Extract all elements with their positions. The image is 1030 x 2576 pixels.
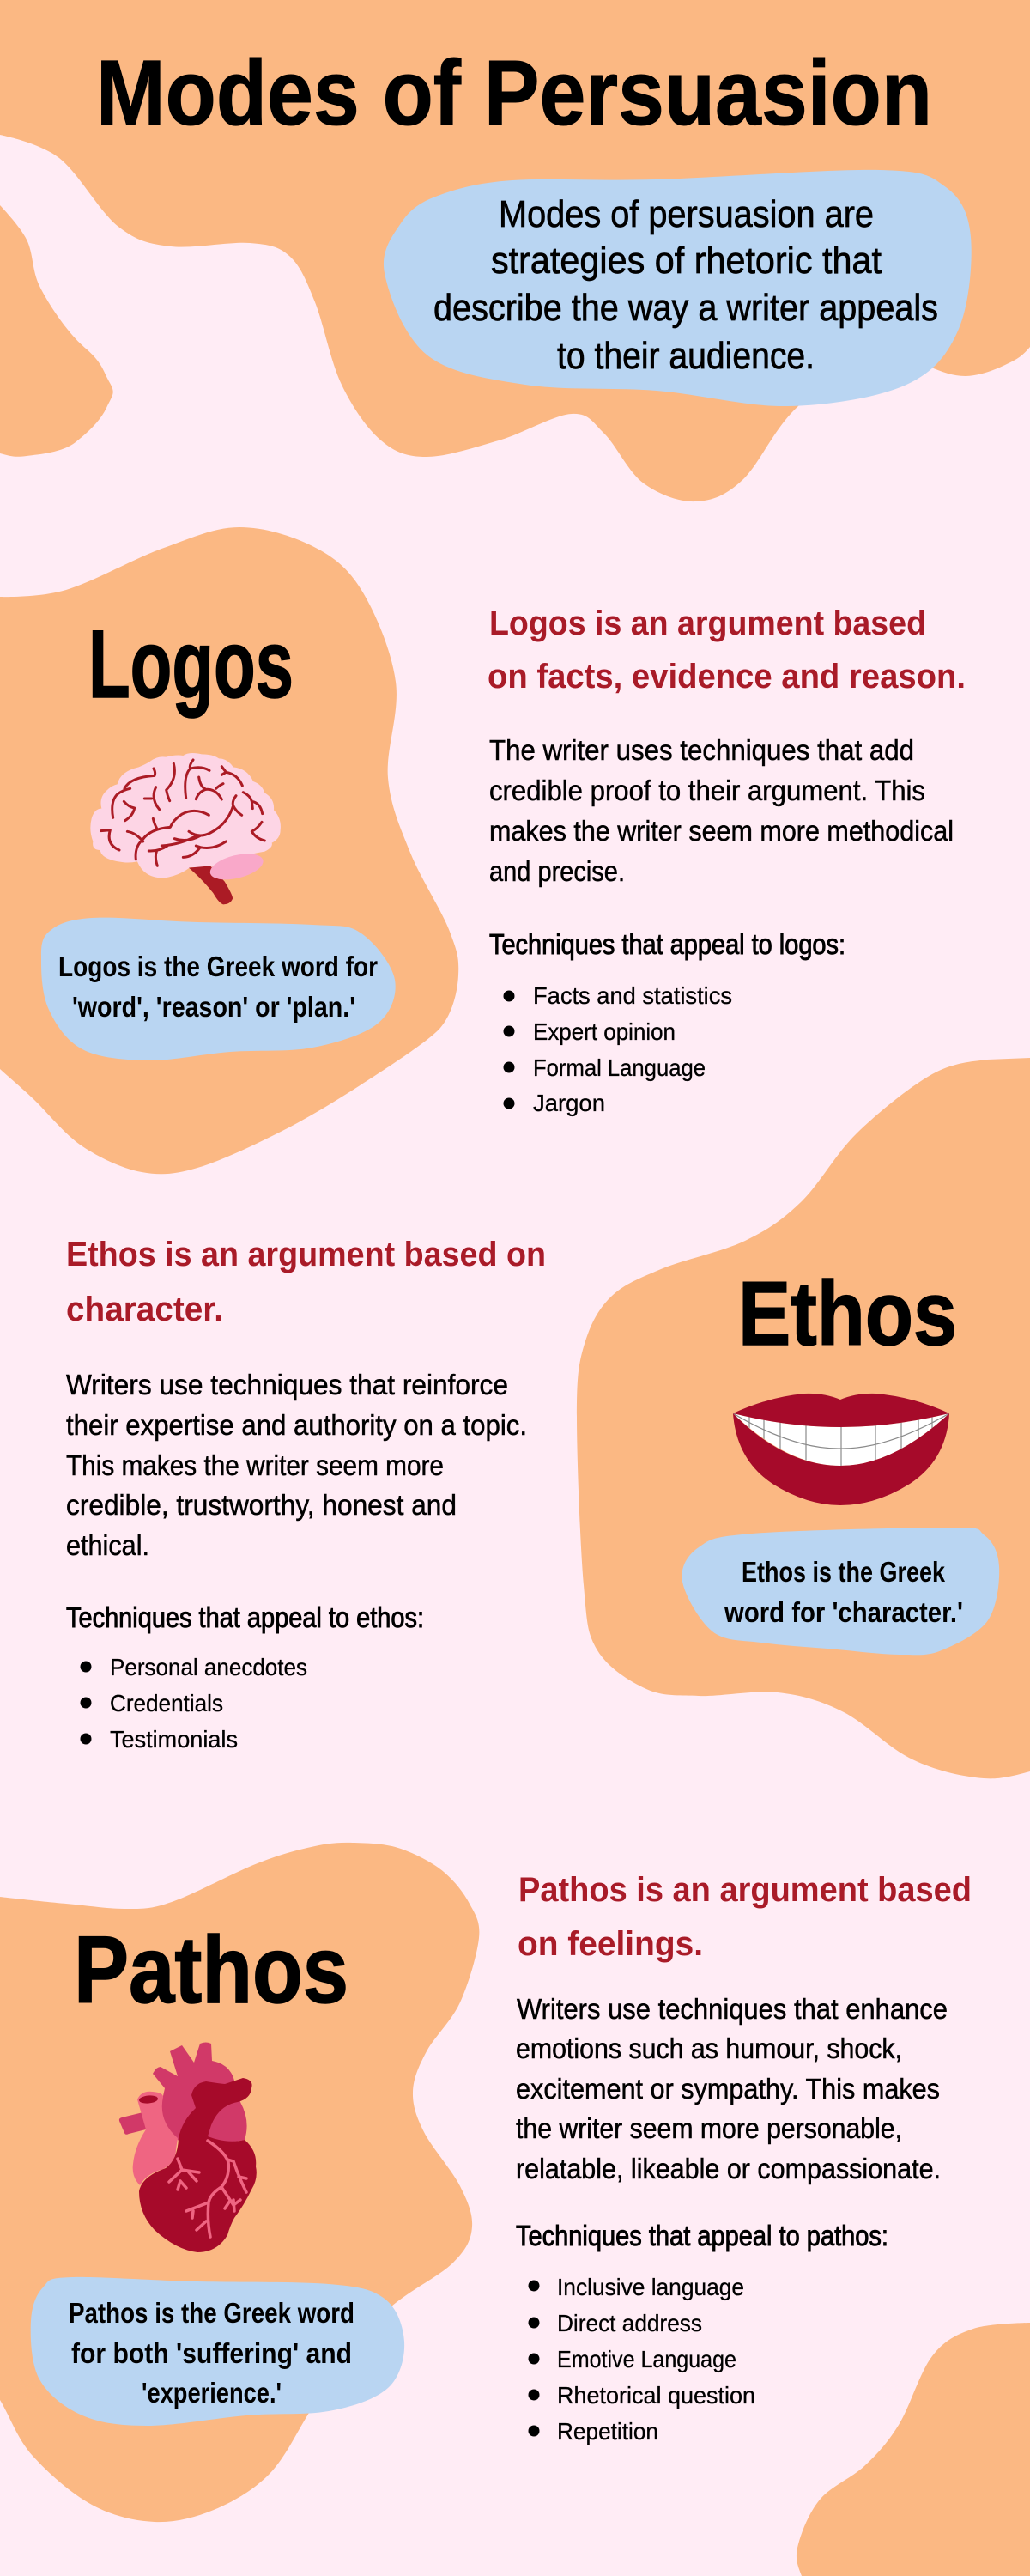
panel: logos: [0, 527, 966, 1174]
ethos heading text: [66, 1236, 546, 1328]
logos caption: 'word', 'reason' or 'plan.': [72, 991, 355, 1023]
icon: brain: [90, 753, 281, 904]
pathos caption: Pathos is the Greek word: [69, 2297, 354, 2329]
ethos body text: Writers use techniques that reinforce: [66, 1369, 508, 1400]
logos heading: Logos: [88, 611, 294, 718]
ethos blue blob: [682, 1528, 999, 1655]
ethos body text: This makes the writer seem more: [66, 1449, 444, 1481]
ethos techniques list: Personal anecdotes: [110, 1654, 307, 1680]
intro text: [433, 193, 938, 377]
pathos body text: emotions such as humour, shock,: [516, 2032, 902, 2064]
pathos techniques list: Repetition: [557, 2418, 658, 2445]
logos body text: The writer uses techniques that add: [489, 734, 914, 766]
ethos caption: word for 'character.': [724, 1596, 963, 1628]
ethos techniques label: Techniques that appeal to ethos:: [66, 1601, 424, 1633]
pathos heading text: Pathos is an argument based: [518, 1871, 972, 1909]
pathos body text: Writers use techniques that enhance: [517, 1993, 948, 2025]
ethos body text: ethical.: [66, 1529, 149, 1561]
logos caption: [58, 951, 378, 1023]
ethos caption: Ethos is the Greek: [742, 1556, 946, 1588]
pathos body text: relatable, likeable or compassionate.: [516, 2153, 941, 2184]
ethos body text: credible, trustworthy, honest and: [66, 1489, 457, 1521]
logos blue blob: [41, 918, 396, 1060]
logos heading text: Logos is an argument based: [489, 605, 926, 642]
intro text: Modes of persuasion are: [499, 193, 874, 235]
pathos blue blob: [31, 2277, 404, 2426]
pathos techniques label: Techniques that appeal to pathos:: [516, 2220, 888, 2251]
logos body text: credible proof to their argument. This: [489, 775, 925, 806]
ethos techniques list: Testimonials: [110, 1726, 238, 1753]
pathos heading text: [518, 1871, 972, 1963]
panel: pathos: [0, 1843, 972, 2522]
ethos techniques list: Credentials: [110, 1690, 223, 1716]
pathos techniques list: Emotive Language: [557, 2346, 736, 2372]
ethos techniques list: [81, 1654, 307, 1753]
intro text: strategies of rhetoric that: [491, 240, 882, 282]
pathos body text: [516, 1993, 948, 2184]
logos heading text: on facts, evidence and reason.: [488, 658, 966, 696]
ethos orange blob: [577, 1058, 1030, 1778]
pathos techniques list: Inclusive language: [557, 2274, 744, 2300]
ethos heading text: Ethos is an argument based on: [66, 1236, 546, 1273]
header orange blob: [0, 0, 1030, 501]
bottom right orange blob: [797, 2323, 1030, 2576]
icon: heart: [119, 2042, 257, 2252]
pathos orange blob: [0, 1843, 479, 2522]
pathos caption: [69, 2297, 354, 2409]
ethos caption: [724, 1556, 963, 1628]
ethos body text: [66, 1369, 527, 1561]
icon: smiling lips: [733, 1394, 949, 1505]
logos techniques list: Jargon: [533, 1090, 605, 1116]
title: Modes of Persuasion: [96, 40, 932, 144]
pathos body text: the writer seem more personable,: [516, 2112, 902, 2144]
intro panel: [384, 170, 972, 406]
logos orange blob: [0, 527, 458, 1174]
ethos heading: Ethos: [738, 1263, 957, 1364]
logos body text: and precise.: [489, 855, 625, 887]
intro text: to their audience.: [557, 335, 815, 377]
logos techniques list: Formal Language: [533, 1054, 706, 1081]
logos techniques label: Techniques that appeal to logos:: [489, 928, 845, 960]
logos heading text: [488, 605, 966, 696]
pathos heading: Pathos: [74, 1917, 348, 2023]
logos techniques list: [503, 982, 732, 1116]
left side orange blob: [0, 205, 113, 457]
pathos heading text: on feelings.: [518, 1925, 703, 1963]
ethos heading text: character.: [66, 1291, 223, 1328]
pathos techniques list: Rhetorical question: [557, 2382, 755, 2409]
intro blue blob: [384, 170, 972, 406]
logos body text: makes the writer seem more methodical: [489, 815, 954, 847]
logos techniques list: Expert opinion: [533, 1018, 676, 1045]
ethos body text: their expertise and authority on a topic.: [66, 1409, 527, 1441]
pathos techniques list: Direct address: [557, 2310, 702, 2336]
logos techniques list: Facts and statistics: [533, 982, 732, 1009]
logos caption: Logos is the Greek word for: [58, 951, 378, 982]
logos body text: [489, 734, 954, 887]
pathos caption: for both 'suffering' and: [71, 2337, 352, 2369]
pathos caption: 'experience.': [142, 2377, 282, 2409]
pathos body text: excitement or sympathy. This makes: [516, 2073, 940, 2105]
panel: ethos: [66, 1058, 1030, 1778]
pathos techniques list: [529, 2274, 755, 2445]
intro text: describe the way a writer appeals: [433, 287, 938, 329]
